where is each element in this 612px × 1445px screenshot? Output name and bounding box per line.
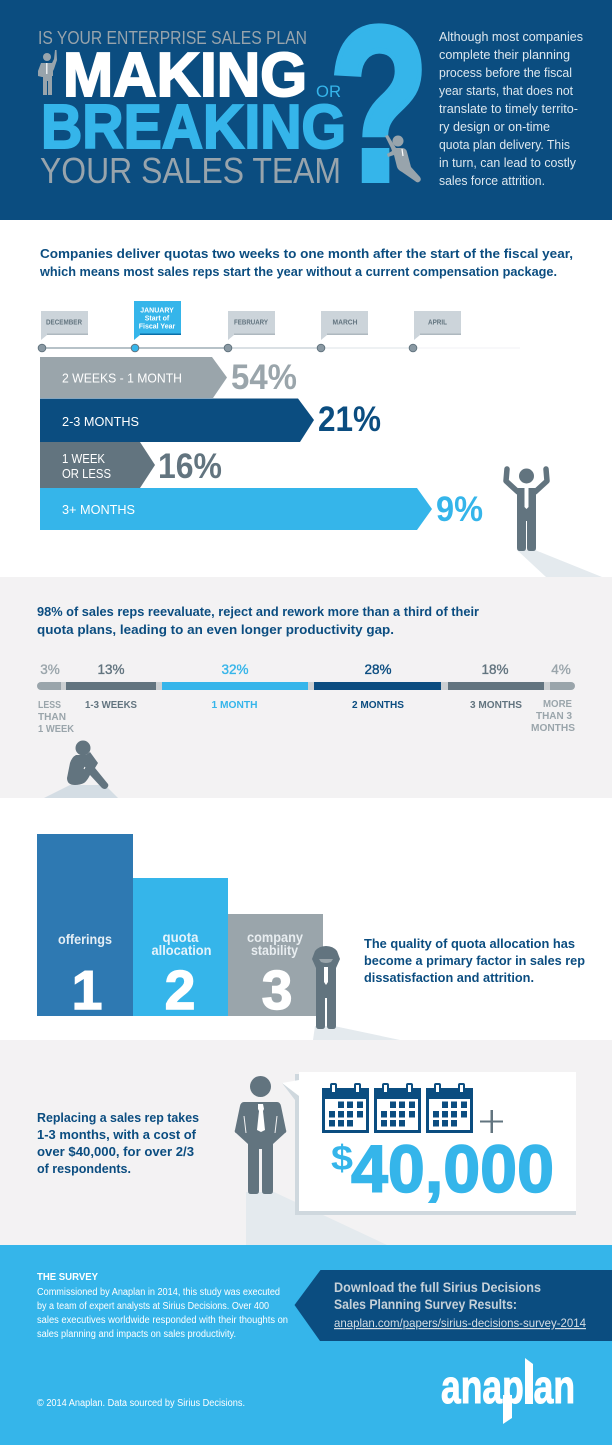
bar: 1 week or less, 16%: 16% — [158, 447, 222, 486]
month: february — [224, 311, 275, 352]
intro paragraph: ry design or on-time — [439, 120, 550, 134]
download arrow banner — [294, 1270, 612, 1341]
bar: 2-3 months, 21%: 2-3 MONTHS — [62, 414, 139, 429]
intro paragraph: process before the fiscal — [439, 66, 572, 80]
dollar sign: $ — [331, 1139, 353, 1178]
month: december — [38, 311, 88, 352]
segmented bar chart: THAN — [38, 712, 66, 723]
segmented bar chart: THAN 3 — [536, 711, 572, 722]
survey description: Commissioned by Anaplan in 2014, this study was executed — [37, 1287, 280, 1298]
logo: anaplan — [441, 1358, 575, 1424]
intro paragraph: in turn, can lead to costly — [439, 156, 577, 170]
title: making: MAKING — [63, 41, 307, 110]
text: replacing a sales rep: 1-3 months, with a cost of — [37, 1127, 197, 1142]
month: january: Fiscal Year — [139, 324, 175, 330]
icon: man with hands on head — [312, 946, 400, 1040]
percent labels: 28% — [364, 662, 392, 677]
text: replacing a sales rep — [37, 1110, 199, 1176]
icon: standing man — [235, 1076, 387, 1245]
bar: company stability, rank 3: stability — [251, 943, 298, 958]
intro paragraph: Although most companies — [439, 30, 583, 44]
bar: 2 weeks - 1 month, 54%: 54% — [231, 358, 297, 397]
icon: three calendars — [322, 1083, 473, 1133]
percent labels: 18% — [481, 662, 509, 677]
survey description: by a team of expert analysts at Sirius Decisions. Over 400 — [37, 1301, 269, 1312]
percent labels — [40, 662, 571, 677]
download arrow banner: anaplan.com/papers/sirius-decisions-survey-2014 — [334, 1316, 586, 1330]
month: january: JANUARY — [140, 308, 174, 314]
callout text: quota allocation: become a primary factor in sales rep — [364, 953, 585, 968]
heading: the survey: THE SURVEY — [37, 1271, 98, 1283]
calendar 2 — [374, 1083, 421, 1133]
title: breaking: BREAKING — [41, 93, 346, 162]
bar: 1 week or less, 16%: 1 WEEK — [62, 451, 105, 466]
panel: replacement cost — [0, 1040, 612, 1245]
calendar 3 — [426, 1083, 473, 1133]
text: replacing a sales rep: over $40,000, for over 2/3 — [37, 1144, 194, 1159]
speech bubble — [282, 1072, 576, 1215]
duration labels — [85, 700, 522, 711]
month: april — [409, 311, 461, 352]
bar: quota allocation, rank 2 — [133, 878, 228, 1021]
panel: quota delivery timing — [0, 220, 612, 577]
bar: company stability, rank 3 — [228, 914, 323, 1021]
icon: man waving — [38, 50, 57, 95]
duration labels: 2 MONTHS — [352, 700, 404, 711]
bar: 2 weeks - 1 month, 54%: 2 WEEKS - 1 MONTH — [62, 370, 182, 386]
bar: 2 weeks - 1 month, 54% — [40, 357, 297, 398]
download arrow banner: Download the full Sirius Decisions — [334, 1279, 541, 1295]
section heading — [39, 247, 573, 279]
month: march: MARCH — [332, 318, 358, 326]
bar: offerings, rank 1 — [37, 834, 133, 1021]
section heading: 98% of sales reps reevaluate, reject and rework more than a third of their — [37, 605, 479, 619]
section heading: quota plans, leading to an even longer productivity gap. — [37, 623, 394, 637]
bar: company stability, rank 3: company — [247, 930, 303, 945]
month: december: DECEMBER — [46, 318, 83, 326]
month: january — [131, 301, 181, 352]
panel: attrition factors — [0, 798, 612, 1040]
intro paragraph: translate to timely territo- — [439, 102, 578, 116]
survey description: sales planning and impacts on sales productivity. — [37, 1329, 236, 1340]
callout text: quota allocation: dissatisfaction and attrition. — [364, 970, 534, 985]
bar: 2-3 months, 21%: 21% — [318, 400, 381, 439]
duration labels: 3 MONTHS — [470, 700, 522, 711]
intro paragraph: quota plan delivery. This — [439, 138, 570, 152]
bar: offerings, rank 1: 1 — [72, 959, 102, 1021]
copyright: © 2014 Anaplan. Data sourced by Sirius Decisions. — [37, 1398, 245, 1409]
callout text: quota allocation — [364, 936, 585, 985]
bar: 1 week or less, 16%: OR LESS — [62, 466, 111, 481]
text: replacing a sales rep: of respondents. — [37, 1161, 131, 1176]
section heading: which means most sales reps start the year without a current compensation package. — [39, 265, 557, 279]
title: your sales team: YOUR SALES TEAM — [40, 150, 341, 191]
month: april: APRIL — [428, 318, 448, 326]
bar: 3+ months, 9%: 9% — [436, 490, 483, 529]
bar: 3+ months, 9% — [40, 488, 483, 530]
intro paragraph — [439, 30, 583, 188]
bar: offerings, rank 1: offerings — [58, 932, 112, 947]
percent labels: 32% — [221, 662, 249, 677]
bar: quota allocation, rank 2: quota — [162, 930, 199, 945]
text: replacing a sales rep: Replacing a sales rep takes — [37, 1110, 199, 1125]
percent labels: 13% — [97, 662, 125, 677]
segmented bar chart: MONTHS — [531, 723, 575, 734]
survey description — [37, 1287, 288, 1340]
panel: header — [0, 0, 612, 227]
panel: rework gap — [0, 577, 612, 798]
icon: man hanging on question mark — [385, 135, 421, 182]
percent labels: 4% — [551, 662, 571, 677]
bar: 3+ months, 9%: 3+ MONTHS — [62, 502, 135, 517]
bar: 2-3 months, 21% — [40, 398, 381, 442]
segmented bar chart: 1 WEEK — [38, 724, 75, 735]
title: is your enterprise sales plan: IS YOUR ENTERPRISE SALES PLAN — [38, 27, 307, 48]
bar: quota allocation, rank 2: 2 — [165, 959, 195, 1021]
intro paragraph: year starts, that does not — [439, 84, 574, 98]
calendar 1 — [322, 1083, 369, 1133]
bar: 1 week or less, 16% — [40, 442, 222, 488]
timeline — [38, 301, 520, 352]
segmented bar chart: LESS — [38, 700, 61, 711]
panel: footer — [0, 1245, 612, 1445]
callout text: quota allocation: The quality of quota allocation has — [364, 936, 575, 951]
amount: 40,000: 40,000 — [351, 1132, 554, 1207]
section heading — [37, 605, 479, 637]
duration labels: 1-3 WEEKS — [85, 700, 137, 711]
bar: company stability, rank 3: 3 — [262, 959, 292, 1021]
title: or: OR — [316, 82, 341, 101]
intro paragraph: complete their planning — [439, 48, 570, 62]
icon: man with arms raised — [506, 468, 602, 577]
intro paragraph: sales force attrition. — [439, 174, 545, 188]
duration labels: 1 MONTH — [212, 700, 258, 711]
percent labels: 3% — [40, 662, 60, 677]
bar: quota allocation, rank 2: allocation — [152, 943, 212, 958]
segmented bar chart: MORE — [543, 699, 572, 710]
icon: plus — [480, 1110, 503, 1133]
segmented bar chart — [37, 662, 575, 735]
section heading: Companies deliver quotas two weeks to one month after the start of the fiscal year, — [40, 247, 573, 261]
month: march — [317, 311, 368, 352]
download arrow banner: Sales Planning Survey Results: — [334, 1296, 517, 1312]
survey description: sales executives worldwide responded with their thoughts on — [37, 1315, 288, 1326]
month: january: Start of — [145, 316, 170, 322]
month: february: FEBRUARY — [234, 318, 268, 326]
icon: seated dejected man — [44, 740, 118, 798]
